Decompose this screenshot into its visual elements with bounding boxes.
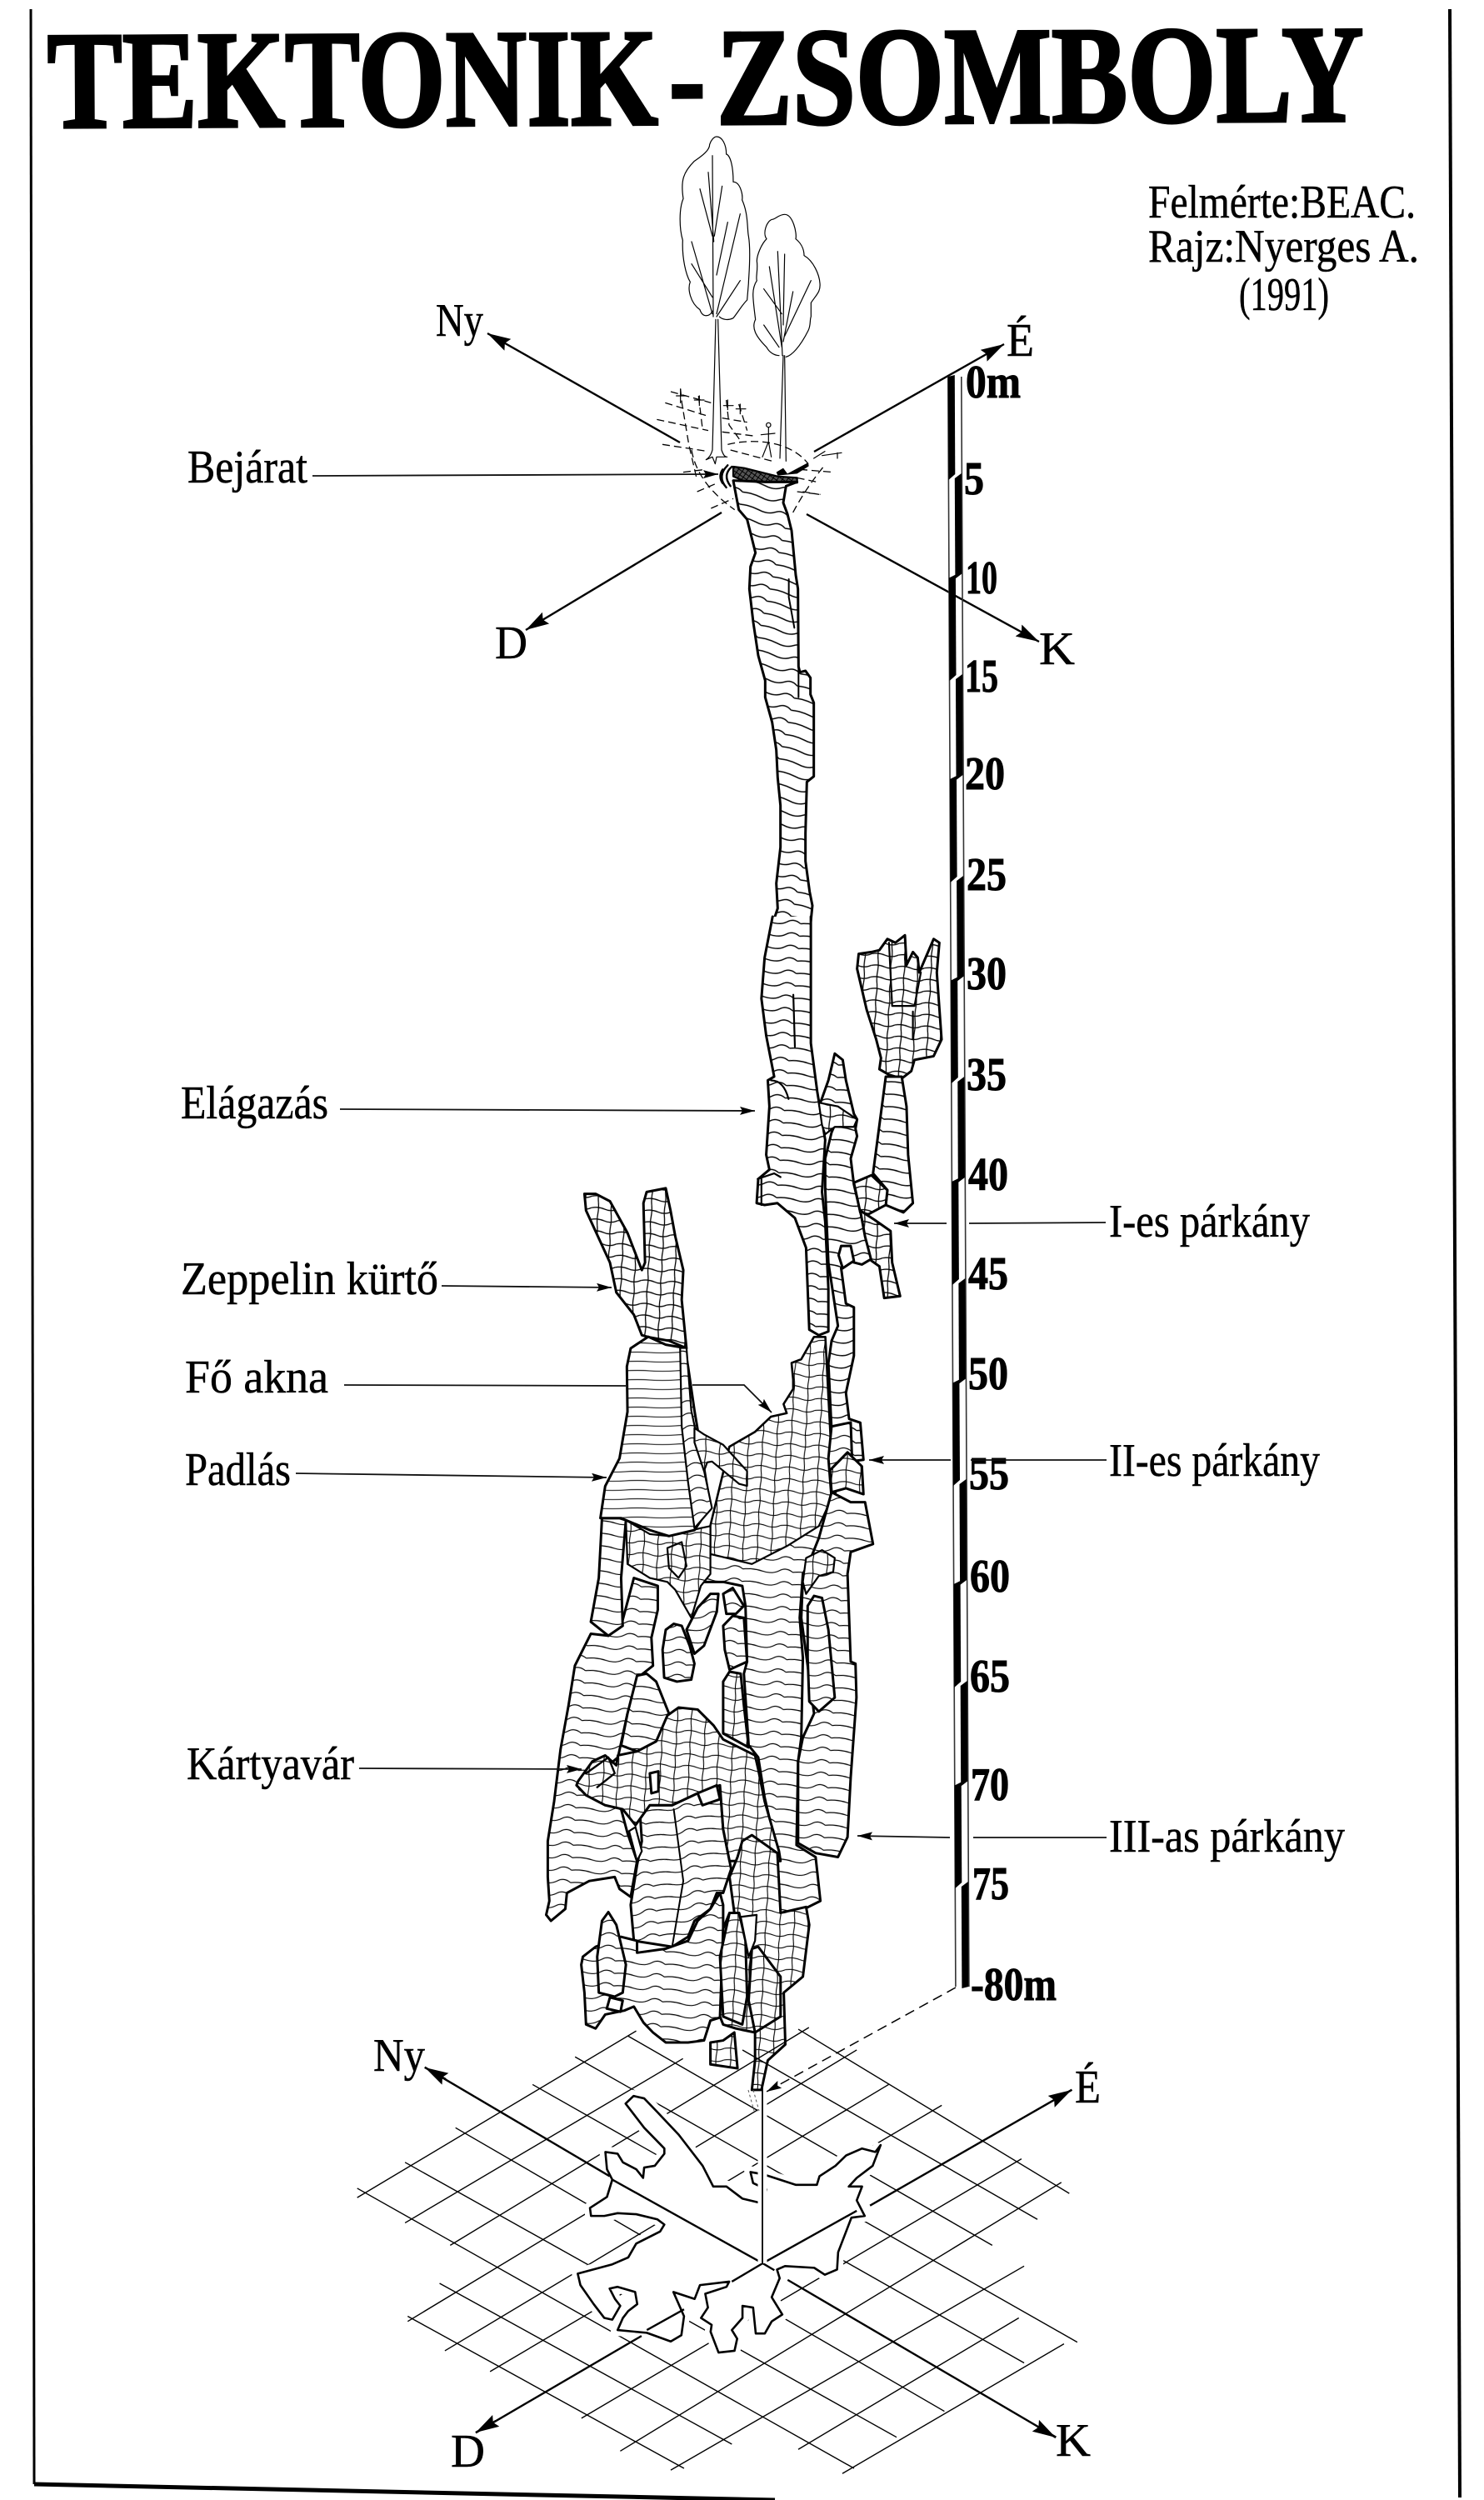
axes — [425, 2068, 1072, 2438]
vertical plumb line and dashed reference — [748, 1988, 956, 2263]
lower compass arrowheads and labels: Ny — [373, 2030, 425, 2082]
lower compass arrowheads and labels — [373, 2030, 1101, 2478]
II-es párkány knot — [830, 1452, 863, 1494]
depth scale numbers: 15 — [965, 651, 998, 702]
second tube — [821, 1053, 872, 1463]
depth scale numbers: 55 — [969, 1448, 1009, 1500]
mesh below Padlás — [626, 1520, 711, 1618]
lower mesh cluster — [720, 1835, 809, 2090]
upper compass: D — [495, 618, 527, 669]
entrance hatch — [720, 462, 809, 488]
mesh column — [723, 1672, 749, 1748]
label: Elágazás: Elágazás — [181, 1078, 328, 1129]
cave plan white halo — [577, 2096, 881, 2352]
tree 1 — [680, 137, 750, 464]
label: Fő akna — [185, 1352, 772, 1412]
credits: (1991) — [1239, 269, 1329, 321]
main shaft body — [704, 1338, 832, 1977]
left labels — [181, 442, 772, 1790]
depth scale numbers: 45 — [968, 1248, 1008, 1300]
ledge arm mesh — [860, 1211, 900, 1298]
ground survey lines — [657, 389, 842, 512]
Padlás block — [601, 1337, 711, 1536]
small knob — [803, 1550, 835, 1594]
trees and surface at the entrance — [657, 137, 842, 512]
depth scale numbers: 25 — [967, 849, 1007, 901]
Kártyavár mesh — [577, 1708, 781, 1861]
depth scale numbers: 70 — [971, 1759, 1009, 1811]
credits — [1148, 177, 1419, 321]
label: II-es párkány: II-es párkány — [1109, 1435, 1320, 1487]
cone above Kártyavár — [621, 1673, 669, 1752]
depth scale numbers: 40 — [968, 1149, 1008, 1201]
tree 2 — [753, 214, 820, 461]
depth scale numbers: 0m — [966, 357, 1021, 408]
label: Padlás — [185, 1444, 607, 1496]
left sheet — [546, 1578, 657, 1921]
credits: Felmérte:BEAC. — [1148, 177, 1416, 228]
connector mesh — [854, 1175, 887, 1214]
Kártyavár details — [586, 1758, 720, 1861]
upper compass — [436, 295, 1075, 675]
title: TEKTONIK — [47, 1, 658, 158]
label: III-as párkány: III-as párkány — [1109, 1811, 1345, 1862]
central card house sheets — [631, 1785, 731, 1947]
upper right crown — [857, 935, 942, 1078]
depth scale numbers: 20 — [965, 748, 1005, 800]
bottom mesh box — [711, 2032, 737, 2068]
label: Zeppelin kürtő: Zeppelin kürtő — [181, 1253, 438, 1305]
cave: upper shaft — [733, 481, 814, 1048]
left column — [591, 1518, 626, 1636]
depth scale numbers: 10 — [966, 552, 997, 604]
upper mesh arm — [694, 1428, 747, 1486]
Zeppelin chimney — [584, 1188, 687, 1348]
depth scale numbers — [964, 357, 1057, 2011]
title: - — [668, 1, 706, 155]
depth scale numbers: 60 — [970, 1551, 1010, 1602]
cave: lower chambers — [546, 1337, 873, 2090]
lower compass arrowheads and labels: É — [1075, 2062, 1101, 2113]
cave plan outline — [577, 2096, 881, 2352]
plan view of the cave on the survey grid — [357, 2028, 1077, 2473]
Fő akna mesh — [711, 1338, 832, 1564]
side strip — [680, 1348, 712, 1528]
depth scale numbers: 30 — [967, 948, 1007, 1000]
right labels — [857, 1196, 1345, 1862]
mesh fingers — [720, 1912, 781, 2032]
credits: Rajz:Nyerges A. — [1148, 221, 1419, 272]
depth scale numbers: 5 — [964, 453, 984, 505]
connector tube — [873, 1077, 913, 1212]
floating pieces — [662, 1542, 747, 1682]
depth scale numbers: 50 — [968, 1348, 1008, 1400]
depth scale numbers: 75 — [972, 1858, 1009, 1910]
upper compass: K — [1039, 623, 1075, 675]
inner pipe — [807, 1596, 835, 1712]
label: I-es párkány: I-es párkány — [1109, 1196, 1310, 1248]
right tube — [798, 1492, 873, 1857]
lower compass arrowheads and labels: D — [451, 2426, 485, 2478]
stalagmite — [597, 1912, 626, 1997]
upper compass: É — [1007, 315, 1034, 367]
small block — [607, 1998, 622, 2012]
cave: middle section, branches and ledges — [584, 917, 942, 1463]
label: Fő akna: Fő akna — [185, 1352, 328, 1403]
Elágazás shaft — [757, 917, 828, 1335]
mesh knot — [819, 1102, 857, 1134]
depth scale numbers: 65 — [970, 1651, 1010, 1702]
lower compass arrowheads and labels: K — [1056, 2415, 1091, 2467]
label: Bejárat: Bejárat — [187, 442, 307, 493]
tube continuation — [828, 1422, 852, 1498]
depth scale numbers: -80m — [971, 1959, 1057, 2011]
label: Padlás: Padlás — [185, 1444, 291, 1496]
survey grid — [357, 2028, 1077, 2473]
title — [47, 0, 1364, 158]
upper compass: Ny — [436, 295, 483, 347]
person — [761, 422, 775, 457]
depth scale bar — [948, 375, 969, 1988]
depth scale numbers: 35 — [967, 1049, 1007, 1101]
bottom lump — [582, 1893, 723, 2042]
label: Kártyavár: Kártyavár — [187, 1738, 354, 1790]
